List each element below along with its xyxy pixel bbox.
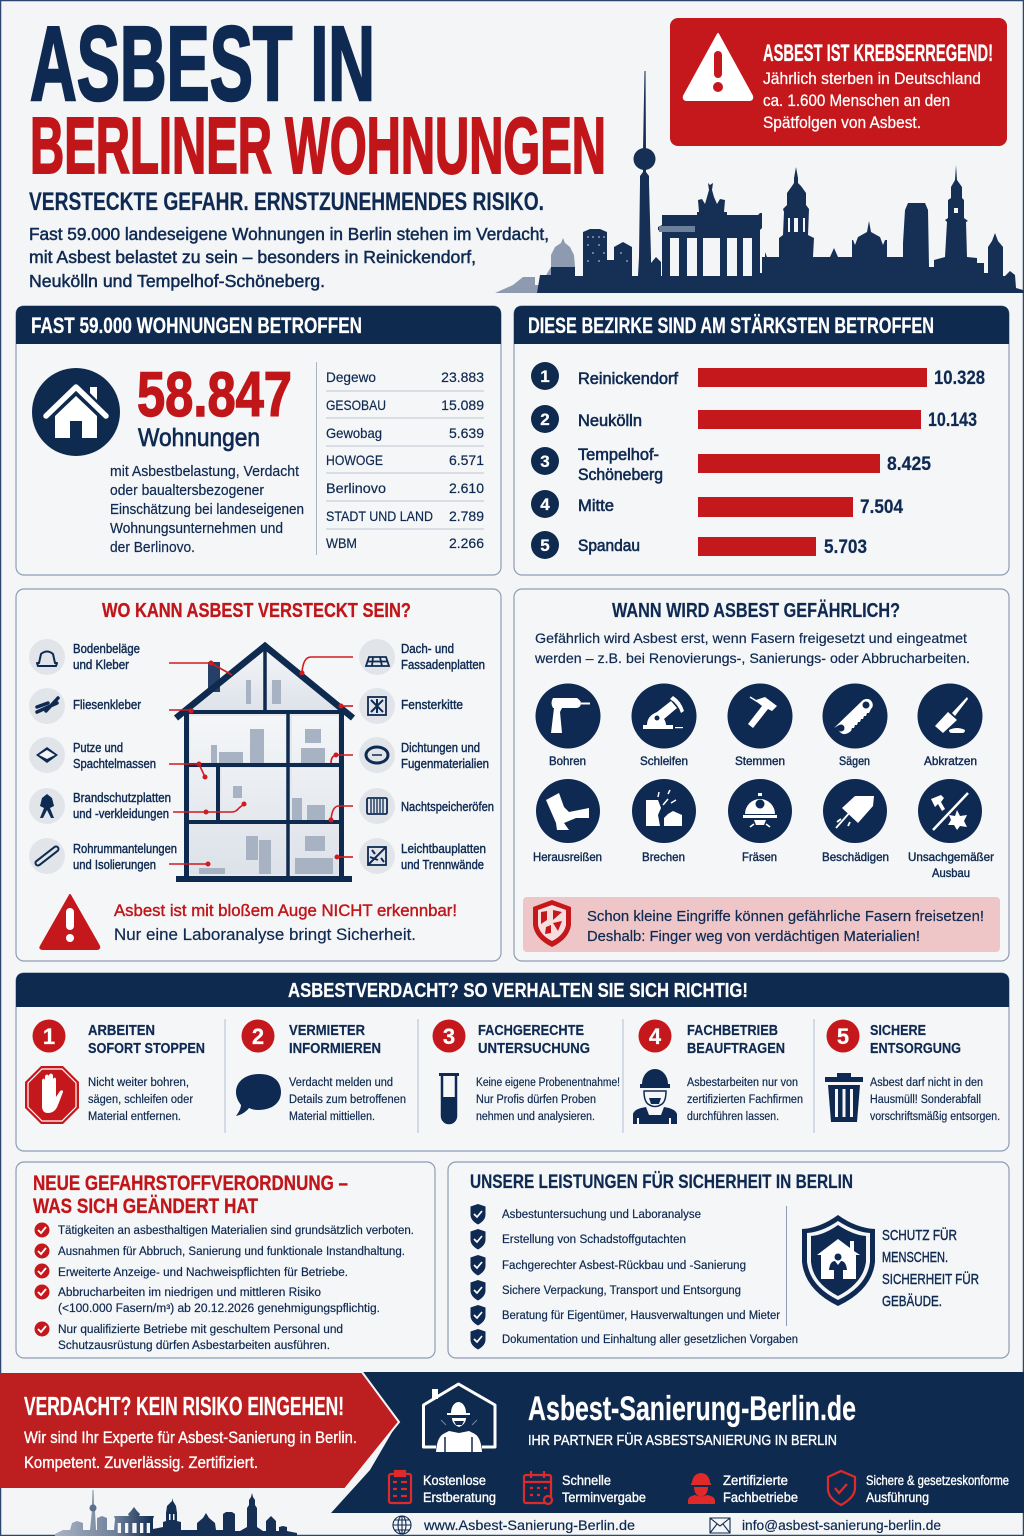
left material list: Rohrummantelungen <box>73 842 177 856</box>
intro text: mit Asbest belastet zu sein – besonders in Reinickendorf, <box>29 247 476 267</box>
callout: Asbest ist krebserregend: Spätfolgen von Asbest. <box>763 113 921 132</box>
table: Wohnungsunternehmen: 6.571 <box>449 452 484 468</box>
icon: house <box>32 368 120 456</box>
right material list: Fensterkitte <box>401 698 463 712</box>
activity icons: Schleifen <box>640 754 688 768</box>
table: Wohnungsunternehmen: HOWOGE <box>326 452 383 468</box>
claim text: GEBÄUDE. <box>882 1293 942 1310</box>
left material list: Spachtelmassen <box>73 757 156 771</box>
step 4: 4 <box>649 1024 662 1049</box>
bar chart: 4 <box>540 495 550 514</box>
step 4: zertifizierten Fachfirmen <box>687 1094 803 1106</box>
bar chart: 2 <box>540 410 550 429</box>
check icons <box>34 1222 50 1336</box>
left material list: Putze und <box>73 741 123 755</box>
activity icons: Bohren <box>549 754 586 768</box>
bar chart: 7.504 <box>860 497 903 518</box>
step 3: Nur Profis dürfen Proben <box>476 1094 596 1106</box>
activity icons: Brechen <box>642 850 685 864</box>
activity icons: Herausreißen <box>533 850 602 864</box>
right material list: Nachtspeicheröfen <box>401 800 494 814</box>
table: Wohnungsunternehmen <box>316 362 484 555</box>
subtitle: VERSTECKTE GEFAHR. ERNSTZUNEHMENDES RISIKO. <box>29 188 544 216</box>
step 5: SICHERE <box>870 1023 926 1039</box>
list: Schutzausrüstung dürfen Asbestarbeiten ausführen. <box>58 1340 330 1352</box>
table: Wohnungsunternehmen: STADT UND LAND <box>326 508 433 524</box>
icon: worker <box>633 1069 677 1124</box>
icon: calendar <box>524 1471 552 1504</box>
footer: contact <box>393 1516 941 1534</box>
footer: small skyline <box>55 1490 297 1536</box>
icon: red worker <box>688 1473 715 1504</box>
heading: NEUE GEFAHRSTOFFVERORDNUNG – <box>33 1172 348 1195</box>
step 4: FACHBETRIEB <box>687 1023 778 1039</box>
footer: benefits: Ausführung <box>866 1490 929 1505</box>
warning banner: Deshalb: Finger weg von verdächtigen Materialien! <box>587 929 920 945</box>
step 2: Verdacht melden und <box>289 1077 393 1089</box>
description: mit Asbestbelastung, Verdacht <box>110 464 299 480</box>
description: oder baualtersbezogener <box>110 483 264 499</box>
bar chart <box>531 362 985 559</box>
bar chart: 8.425 <box>887 454 931 475</box>
footer: benefits: Schnelle <box>562 1473 611 1488</box>
callout: Asbest ist krebserregend: ca. 1.600 Menschen an den <box>763 91 950 110</box>
heading <box>33 1172 348 1218</box>
service list: Beratung für Eigentümer, Hausverwaltungen und Mieter <box>502 1310 780 1322</box>
step 5: ENTSORGUNG <box>870 1041 961 1057</box>
footer: benefits: Zertifizierte <box>723 1473 788 1488</box>
Berlin skyline <box>495 71 1024 293</box>
icon: warning triangle <box>684 34 752 100</box>
footer: benefits: Terminvergabe <box>562 1490 646 1505</box>
bar chart: 3 <box>540 452 550 471</box>
callout: Asbest ist krebserregend <box>670 18 1007 146</box>
activity icons: Stemmen <box>735 754 785 768</box>
icon: trash can <box>825 1073 863 1122</box>
footer: contact: www.Asbest-Sanierung-Berlin.de <box>423 1517 635 1533</box>
step 5: Asbest darf nicht in den <box>870 1077 983 1089</box>
list: Erweiterte Anzeige- und Nachweispflichten für Betriebe. <box>58 1267 348 1279</box>
icon: speech bubble <box>236 1074 281 1116</box>
table: Wohnungsunternehmen: 23.883 <box>441 369 484 385</box>
bar chart: 10.143 <box>928 410 977 431</box>
list: Ausnahmen für Abbruch, Sanierung und funktionale Instandhaltung. <box>58 1246 405 1258</box>
left material list: und -verkleidungen <box>73 807 169 821</box>
icon: red check shield <box>828 1471 855 1505</box>
footer: benefits: Kostenlose <box>423 1473 486 1488</box>
footer: brand: Asbest-Sanierung-Berlin.de <box>528 1390 856 1428</box>
step 4: Asbestarbeiten nur von <box>687 1077 798 1089</box>
left material list <box>29 639 177 874</box>
icon: clipboard <box>389 1471 411 1503</box>
house cross-section <box>169 646 353 882</box>
footer: red call to action: Kompetent. Zuverlässig. Zertifiziert. <box>24 1453 258 1472</box>
panel header: FAST 59.000 WOHNUNGEN BETROFFEN <box>31 313 362 338</box>
panel: Leistungen <box>448 1162 1009 1358</box>
description: Wohnungsunternehmen und <box>110 521 283 537</box>
activity icons: Fräsen <box>742 850 777 864</box>
step 3: nehmen und analysieren. <box>476 1111 595 1123</box>
claim text: SICHERHEIT FÜR <box>882 1270 979 1288</box>
activity icons: Abkratzen <box>924 754 977 768</box>
footer: navy band <box>331 1372 1024 1513</box>
step 4 <box>633 1020 803 1124</box>
footer: red call to action: Wir sind Ihr Experte für Asbest-Sanierung in Berlin. <box>24 1428 357 1447</box>
right material list: Dach- und <box>401 642 454 656</box>
step 1: sägen, schleifen oder <box>88 1094 193 1106</box>
panel: Bezirke <box>514 306 1009 575</box>
activity icons: Unsachgemäßer <box>908 850 994 864</box>
step 1: Material entfernen. <box>88 1111 181 1123</box>
left material list: und Isolierungen <box>73 858 156 872</box>
warning note <box>40 895 457 949</box>
activity icons <box>533 684 994 880</box>
improper removal <box>933 793 968 830</box>
footer: benefits <box>389 1471 1009 1505</box>
table: Wohnungsunternehmen: 2.610 <box>449 480 484 496</box>
break <box>646 800 661 826</box>
step 3: FACHGERECHTE <box>478 1023 584 1039</box>
panel header: ASBESTVERDACHT? SO VERHALTEN SIE SICH RICHTIG! <box>288 980 748 1002</box>
list <box>58 1225 414 1352</box>
step 1: ARBEITEN <box>88 1023 155 1039</box>
footer: contact: info@asbest-sanierung-berlin.de <box>742 1517 941 1533</box>
left material list: und Kleber <box>73 658 129 672</box>
bar chart: Tempelhof- <box>578 446 659 464</box>
step 5: 5 <box>837 1024 849 1049</box>
step 2 <box>236 1020 406 1123</box>
intro text: Neukölln und Tempelhof-Schöneberg. <box>29 271 325 291</box>
intro text <box>534 630 970 666</box>
warning note: Nur eine Laboranalyse bringt Sicherheit. <box>114 926 416 944</box>
description: der Berlinovo. <box>110 540 195 556</box>
service list: Erstellung von Schadstoffgutachten <box>502 1234 686 1246</box>
icon: protection shield <box>802 1215 875 1306</box>
warning banner <box>523 897 1000 952</box>
step 3: 3 <box>443 1024 455 1049</box>
step 3: UNTERSUCHUNG <box>478 1041 590 1057</box>
description: Einschätzung bei landeseigenen <box>110 502 304 518</box>
right material list: Leichtbauplatten <box>401 842 486 856</box>
step 4: BEAUFTRAGEN <box>687 1041 785 1057</box>
drill <box>551 698 581 733</box>
table: Wohnungsunternehmen: Degewo <box>326 369 376 385</box>
footer: brand: IHR PARTNER FÜR ASBESTSANIERUNG IN BERLIN <box>528 1431 837 1449</box>
step 2: 2 <box>252 1024 264 1049</box>
red leader lines <box>169 657 353 864</box>
step 2: Details zum betroffenen <box>289 1094 406 1106</box>
footer: red call to action <box>0 1372 399 1489</box>
left material list: Bodenbeläge <box>73 642 140 656</box>
right material list: Dichtungen und <box>401 741 480 755</box>
step 1: 1 <box>43 1024 55 1049</box>
left material list: Brandschutzplatten <box>73 791 171 805</box>
heading: UNSERE LEISTUNGEN FÜR SICHERHEIT IN BERLIN <box>470 1172 853 1193</box>
icon: envelope <box>710 1518 730 1533</box>
footer: brand <box>528 1390 856 1449</box>
bar chart: 5 <box>540 536 550 555</box>
claim text <box>882 1226 979 1310</box>
panel: Gefahrstoffverordnung <box>16 1162 435 1358</box>
bar chart: 1 <box>540 367 550 386</box>
description <box>110 464 304 556</box>
step 1: SOFORT STOPPEN <box>88 1041 205 1057</box>
table: Wohnungsunternehmen: Gewobag <box>326 425 382 441</box>
bar chart: Neukölln <box>578 412 642 430</box>
footer: red call to action: VERDACHT? KEIN RISIKO EINGEHEN! <box>24 1391 344 1421</box>
shield check icons <box>470 1204 486 1350</box>
right material list: und Trennwände <box>401 858 484 872</box>
step 1 <box>25 1020 205 1124</box>
table: Wohnungsunternehmen: WBM <box>326 535 357 551</box>
step 3 <box>432 1020 620 1123</box>
step 2: VERMIETER <box>289 1023 365 1039</box>
callout: Asbest ist krebserregend: Jährlich sterben in Deutschland <box>763 69 981 88</box>
bar chart: 5.703 <box>824 537 867 558</box>
table: Wohnungsunternehmen: Berlinovo <box>326 480 386 496</box>
heading: WAS SICH GEÄNDERT HAT <box>33 1195 258 1218</box>
panel: Wo kann Asbest versteckt sein <box>16 589 501 961</box>
footer: benefits: Erstberatung <box>423 1490 496 1505</box>
furniture <box>199 680 333 874</box>
icon: red shield <box>533 900 571 947</box>
warning banner: Schon kleine Eingriffe können gefährliche Fasern freisetzen! <box>587 909 984 925</box>
step 2: Material mittiellen. <box>289 1111 375 1123</box>
activity icons: Ausbau <box>932 866 970 880</box>
footer: benefits: Fachbetriebe <box>723 1490 798 1505</box>
grinder <box>647 701 677 725</box>
step 2: INFORMIEREN <box>289 1041 381 1057</box>
icon: globe <box>393 1516 411 1534</box>
panel header <box>16 306 501 344</box>
right material list: Fassadenplatten <box>401 658 485 672</box>
table: Wohnungsunternehmen: 15.089 <box>441 397 484 413</box>
bar chart: 10.328 <box>934 368 985 389</box>
step 5 <box>825 1020 1000 1123</box>
table: Wohnungsunternehmen: 2.789 <box>449 508 484 524</box>
right material list <box>359 639 494 874</box>
hammer <box>748 697 777 728</box>
bar chart: Reinickendorf <box>578 370 678 388</box>
table: Wohnungsunternehmen: 2.266 <box>449 535 484 551</box>
bar chart: Schöneberg <box>578 466 663 484</box>
activity icons: Beschädigen <box>822 850 889 864</box>
step 5: Hausmüll! Sonderabfall <box>870 1094 981 1106</box>
step 5: vorschriftsmäßig entsorgen. <box>870 1111 1000 1123</box>
panel: betroffene Wohnungen <box>16 306 501 575</box>
panel header <box>514 306 1009 344</box>
step 1: Nicht weiter bohren, <box>88 1077 189 1089</box>
service list: Dokumentation und Einhaltung aller gesetzlichen Vorgaben <box>502 1334 798 1346</box>
panel header <box>16 973 1009 1007</box>
intro text: Gefährlich wird Asbest erst, wenn Fasern freigesetzt und eingeatmet <box>535 630 967 646</box>
title line 1: ASBEST IN <box>30 5 375 123</box>
big number: 58.847 <box>137 360 292 430</box>
activity icons: Sägen <box>839 754 870 768</box>
warning note: Asbest ist mit bloßem Auge NICHT erkennbar! <box>114 902 457 920</box>
icon: test tube <box>439 1073 459 1123</box>
list: (<100.000 Fasern/m³) ab 20.12.2026 genehmigungspflichtig. <box>58 1303 380 1315</box>
header: title <box>30 5 606 190</box>
panel: Wann wird Asbest gefaehrlich <box>514 589 1009 961</box>
service list: Sichere Verpackung, Transport und Entsorgung <box>502 1285 741 1297</box>
tear out <box>546 793 589 830</box>
left material list: Fliesenkleber <box>73 698 141 712</box>
right material list: Fugenmaterialien <box>401 757 489 771</box>
intro text <box>29 224 549 291</box>
bar chart: Spandau <box>578 537 640 555</box>
panel: betroffene Wohnungen: Wohnungen <box>138 424 260 452</box>
list: Nur qualifizierte Betriebe mit geschultem Personal und <box>58 1324 343 1336</box>
scraper <box>935 712 957 733</box>
list: Tätigkeiten an asbesthaltigen Materialien sind grundsätzlich verboten. <box>58 1225 414 1237</box>
step 3: Keine eigene Probenentnahme! <box>476 1077 620 1089</box>
claim text: MENSCHEN. <box>882 1250 948 1266</box>
claim text: SCHUTZ FÜR <box>882 1226 957 1244</box>
list: Abbrucharbeiten im niedrigen und mittleren Risiko <box>58 1287 321 1299</box>
service list: Fachgerechter Asbest-Rückbau und -Sanierung <box>502 1260 746 1272</box>
milling <box>745 799 775 814</box>
heading: WANN WIRD ASBEST GEFÄHRLICH? <box>612 599 900 622</box>
footer: logo house with worker <box>424 1384 495 1452</box>
service list <box>502 1209 798 1346</box>
table: Wohnungsunternehmen: 5.639 <box>449 425 484 441</box>
icon: stop hand <box>25 1066 79 1124</box>
damage <box>842 796 874 823</box>
bar chart: Mitte <box>578 497 614 515</box>
title line 2: BERLINER WOHNUNGEN <box>30 101 606 190</box>
service list: Asbestuntersuchung und Laboranalyse <box>502 1209 701 1221</box>
heading: WO KANN ASBEST VERSTECKT SEIN? <box>102 600 411 622</box>
saw <box>834 699 873 734</box>
intro text: Fast 59.000 landeseigene Wohnungen in Berlin stehen im Verdacht, <box>29 224 549 244</box>
panel: Verhalten <box>16 973 1009 1151</box>
table: Wohnungsunternehmen: GESOBAU <box>326 397 386 413</box>
intro text: werden – z.B. bei Renovierungs-, Sanierungs- oder Abbrucharbeiten. <box>534 650 970 666</box>
step 4: durchführen lassen. <box>687 1111 779 1123</box>
